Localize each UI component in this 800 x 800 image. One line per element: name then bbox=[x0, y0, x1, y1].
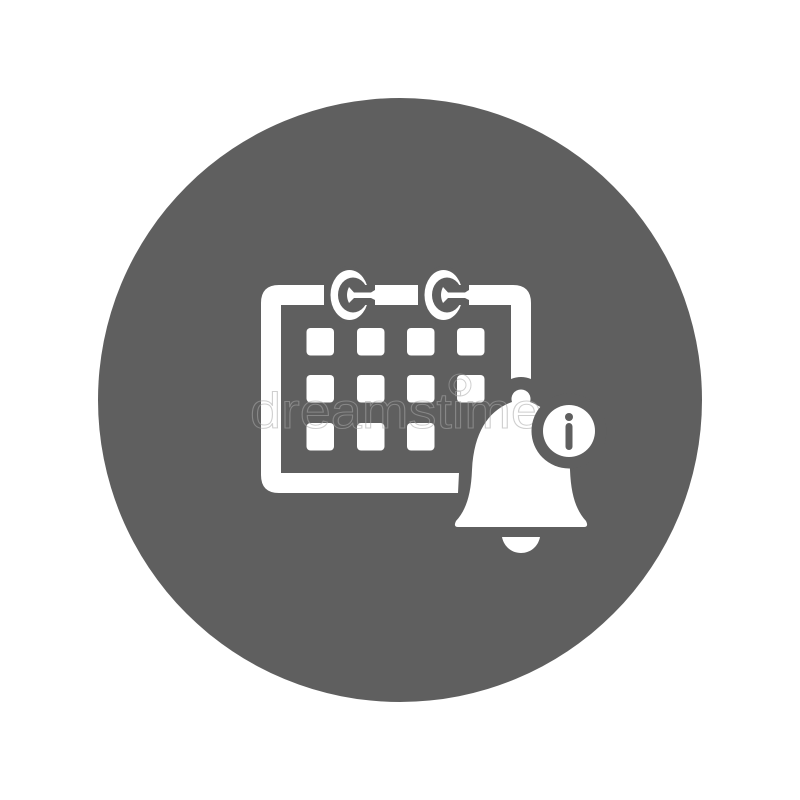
panel: dark grey circle background bbox=[98, 98, 702, 702]
icon: right binder ring bbox=[418, 266, 469, 324]
icon: bell clapper bbox=[502, 537, 540, 553]
watermark text: dreamstime bbox=[250, 383, 542, 439]
icon: left binder ring bbox=[324, 266, 375, 324]
icon: calendar date grid bbox=[306, 328, 484, 450]
icon: info badge bbox=[532, 394, 606, 468]
icon: bell bbox=[455, 389, 587, 553]
icon: calendar frame bbox=[261, 285, 531, 493]
